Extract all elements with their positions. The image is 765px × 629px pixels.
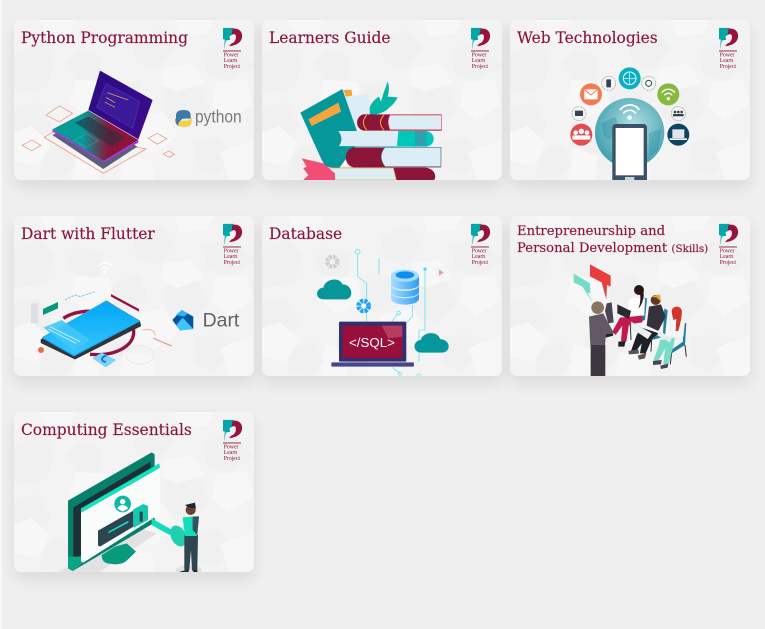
panel: Dart with Flutter <box>14 216 254 376</box>
title: Computing Essentials <box>21 421 192 439</box>
icon: logo: Learn <box>472 254 485 260</box>
title: Python Programming <box>21 29 188 47</box>
panel: Computing Essentials <box>14 412 254 572</box>
icon: logo: Project <box>224 64 240 70</box>
icon: monitor and key illustration <box>58 452 202 575</box>
icon: meeting people illustration <box>574 264 686 376</box>
icon: logo: Project <box>472 64 488 70</box>
icon: logo: Power <box>472 248 486 254</box>
icon: globe and devices illustration <box>570 67 689 184</box>
icon: dart logo <box>172 310 240 332</box>
panel: Learners Guide <box>262 20 502 180</box>
icon: dart logo: Dart <box>203 311 240 332</box>
icon: logo <box>223 420 242 462</box>
label: SQL: </SQL> <box>349 335 395 350</box>
title: Database <box>269 225 342 243</box>
panel: Entrepreneurship and Personal Development <box>510 216 750 376</box>
icon: logo: Learn <box>720 254 733 260</box>
title: Dart with Flutter <box>21 225 155 243</box>
panel: Python Programming <box>14 20 254 180</box>
icon: python logo: python <box>195 107 242 127</box>
icon: logo: Project <box>720 64 736 70</box>
icon: logo: Learn <box>224 450 237 456</box>
title: Web Technologies <box>517 29 658 47</box>
icon: logo: Project <box>720 260 736 266</box>
panel: Web Technologies <box>510 20 750 180</box>
panel: Database <box>262 216 502 376</box>
icon: logo <box>471 224 490 266</box>
icon: logo <box>223 224 242 266</box>
icon: logo <box>223 28 242 70</box>
icon: logo: Power <box>720 52 734 58</box>
icon: logo: Learn <box>224 58 237 64</box>
title: Entrepreneurship and <box>517 224 665 239</box>
icon: logo: Learn <box>224 254 237 260</box>
icon: phone illustration <box>31 263 172 367</box>
title: Learners Guide <box>269 29 390 47</box>
icon: logo: Power <box>224 248 238 254</box>
icon: logo <box>719 28 738 70</box>
icon: laptop illustration <box>22 71 175 173</box>
icon: logo: Project <box>224 456 240 462</box>
icon: logo: Project <box>224 260 240 266</box>
icon: logo: Project <box>472 260 488 266</box>
icon: python logo <box>175 107 242 127</box>
icon: logo: Power <box>224 444 238 450</box>
icon: books illustration <box>300 82 442 180</box>
icon: logo: Learn <box>472 58 485 64</box>
icon: logo <box>719 224 738 266</box>
icon: logo: Power <box>472 52 486 58</box>
icon: logo: Power <box>224 52 238 58</box>
icon: logo: Power <box>720 248 734 254</box>
icon: logo <box>471 28 490 70</box>
title <box>517 224 708 256</box>
icon: logo: Learn <box>720 58 733 64</box>
title: Personal Development (Skills) <box>517 241 708 256</box>
